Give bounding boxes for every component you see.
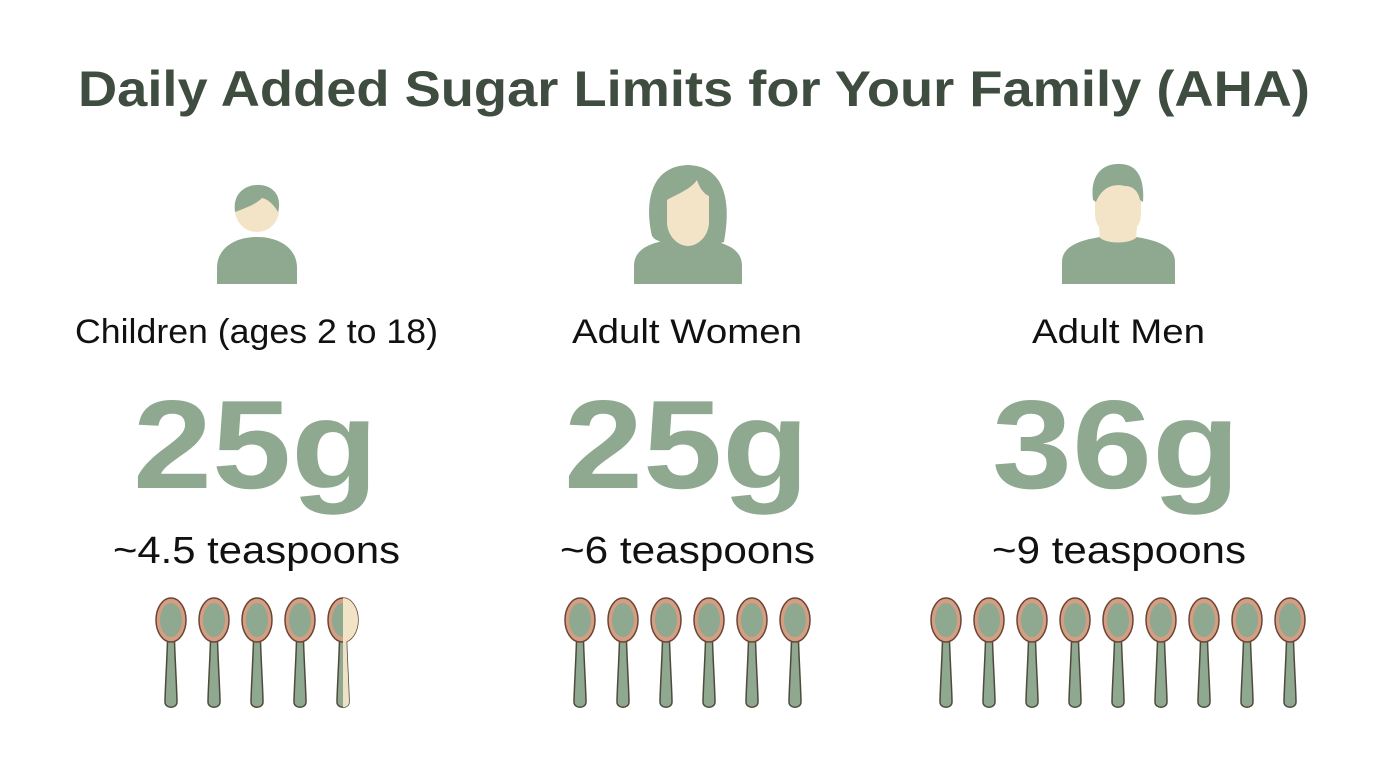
panel: men <box>931 164 1305 707</box>
title: Daily Added Sugar Limits for Your Family (AHA) <box>78 61 1310 117</box>
label: men: Adult Men <box>1032 313 1205 351</box>
icon: man <box>1062 164 1175 284</box>
label: children: Children (ages 2 to 18) <box>75 313 438 351</box>
number: 36g men: 36g <box>992 374 1240 515</box>
text: 6 teaspoons: ~6 teaspoons <box>560 530 815 572</box>
number: 25g children: 25g <box>133 374 378 515</box>
icon: child <box>217 185 297 284</box>
panel: children <box>75 185 438 707</box>
text: 9 teaspoons: ~9 teaspoons <box>992 530 1246 572</box>
number: 25g women: 25g <box>564 374 809 515</box>
spoons: men <box>931 598 1305 707</box>
text: 4.5 teaspoons: ~4.5 teaspoons <box>113 530 400 572</box>
spoons: children <box>156 598 358 707</box>
panel: women <box>560 165 815 707</box>
icon: woman <box>634 165 742 284</box>
spoons: women <box>565 598 810 707</box>
label: women: Adult Women <box>572 313 802 351</box>
